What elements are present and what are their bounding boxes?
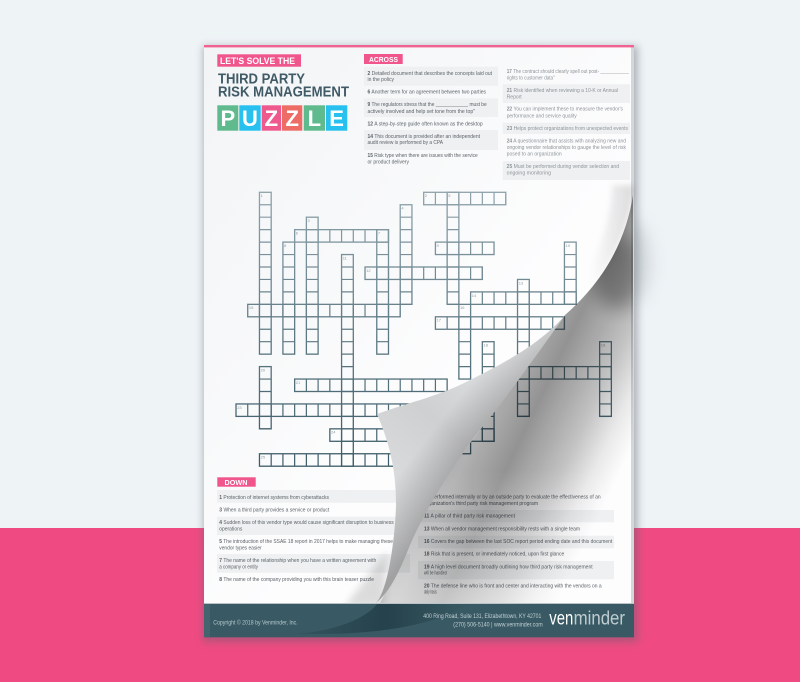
down clues second column: daily basis xyxy=(424,590,437,596)
copyright: Copyright © 2018 by Venminder, Inc. xyxy=(213,619,298,627)
cell numbers: 16 xyxy=(460,305,465,310)
footer bar xyxy=(204,603,634,637)
down clues first column: 3 When a third party provides a service or product xyxy=(219,508,330,514)
down clues second column: organization's third party risk management program xyxy=(424,501,538,507)
cell numbers: 17 xyxy=(436,318,442,323)
across clues first column: or product delivery xyxy=(368,159,409,165)
across clues second column: 21 Risk identified when reviewing a 10-K or Annual xyxy=(507,88,618,94)
venminder logo wordmark xyxy=(549,607,625,629)
puzzle letter tiles xyxy=(217,105,347,131)
curl shadow beyond page edge xyxy=(616,222,648,302)
shadow cast by page curl xyxy=(380,195,644,603)
cell numbers: 18 xyxy=(484,343,489,348)
down clues second column xyxy=(424,495,613,596)
vertical cell dividers xyxy=(265,204,606,466)
puzzle letter tiles: P xyxy=(220,106,235,131)
cell numbers: 25 xyxy=(261,455,266,460)
page sheet xyxy=(204,45,634,637)
cell numbers: 23 xyxy=(237,405,242,410)
puzzle letter tiles: Z xyxy=(285,106,299,131)
puzzle letter tiles: E xyxy=(329,106,344,131)
across clues first column: 14 This document is provided after an independent xyxy=(368,134,481,140)
venminder logo wordmark: ven xyxy=(549,607,573,629)
cell numbers: 15 xyxy=(249,305,254,310)
down clues first column: 4 Sudden loss of this vendor type would cause significant disruption to business xyxy=(219,520,394,526)
cell numbers: 8 xyxy=(284,243,287,248)
across clues first column: audit review is performed by a CPA xyxy=(368,140,444,146)
title xyxy=(218,71,349,101)
down clues first column: 7 The name of the relationship when you have a written agreement with xyxy=(219,558,377,564)
down clues second column: 13 When all vendor management responsibility rests with a single team xyxy=(424,526,580,532)
puzzle letter tiles: U xyxy=(242,106,258,131)
across clues first column: 15 Risk type when there are issues with the service xyxy=(368,153,478,159)
across clues second column: 25 Must be performed during vendor selection and xyxy=(507,164,619,170)
across clues second column: rights to customer data" xyxy=(507,76,555,82)
title: THIRD PARTY xyxy=(218,71,305,87)
across clues first column: 12 A step-by-step guide often known as the desktop xyxy=(368,121,483,127)
cell numbers: 7 xyxy=(378,230,381,236)
across clues first column: 2 Detailed document that describes the concepts laid out xyxy=(368,71,493,77)
clue bands xyxy=(217,490,614,579)
horizontal words xyxy=(236,192,611,466)
down clues second column: 19 A high level document broadly outlining how third party risk management xyxy=(424,564,593,570)
page drop shadow xyxy=(203,46,638,642)
across clues first column: 9 The regulators stress that the ____________ must be xyxy=(368,102,487,108)
across clues first column xyxy=(368,71,493,165)
down clues first column: operations xyxy=(219,527,243,533)
soft shadow left of flap xyxy=(346,554,390,603)
across clues first column: in the policy xyxy=(368,77,394,83)
tagline: let's solve the: LET'S SOLVE THE xyxy=(220,56,295,67)
puzzle letter tiles: L xyxy=(308,106,321,131)
down heading: DOWN xyxy=(224,478,248,487)
across clues second column: 24 A questionnaire that assists with analyzing new and xyxy=(507,139,626,145)
clue bands xyxy=(364,67,630,180)
across clues second column: 17 The contract should clearly spell out post- ___________ xyxy=(507,69,629,75)
venminder logo wordmark: minder xyxy=(574,607,625,629)
across clues second column: ongoing vendor relationships to gauge the level of risk xyxy=(507,145,626,151)
cell numbers: 5 xyxy=(448,193,451,198)
across heading: ACROSS xyxy=(369,55,398,64)
down clues second column: will be handled xyxy=(424,571,447,577)
crossword grid xyxy=(236,192,611,466)
across clues second column: ongoing monitoring xyxy=(507,171,551,177)
across clues second column xyxy=(507,69,629,177)
contact details: 400 Ring Road, Suite 131, Elizabethtown, KY 42701 xyxy=(423,613,542,620)
cell numbers: 21 xyxy=(296,380,301,385)
down clues first column: 5 The introduction of the SSAE 18 report in 2017 helps to make managing these xyxy=(219,539,393,545)
cell numbers: 1 xyxy=(261,193,264,198)
cell numbers: 14 xyxy=(472,293,477,298)
cell numbers: 19 xyxy=(601,343,606,348)
down clues first column xyxy=(219,495,394,583)
across clues second column: 23 Helps protect organizations from unexpected events xyxy=(507,126,628,132)
across clues second column: performance and service quality xyxy=(507,113,577,119)
background: pink band xyxy=(0,528,800,682)
curled page flap xyxy=(376,314,566,603)
vertical words xyxy=(259,192,611,466)
curl shadow on footer xyxy=(293,604,470,634)
down clues second column: 10 Performed internally or by an outside party to evaluate the effectiveness of an xyxy=(424,495,601,501)
title: RISK MANAGEMENT xyxy=(218,85,349,101)
down clues panel xyxy=(217,477,614,596)
down clues second column: 16 Covers the gap between the last SOC report period ending date and this document xyxy=(424,539,613,545)
cell numbers: 2 xyxy=(425,193,428,198)
contact details: (270) 506-5140 | www.venminder.com xyxy=(453,622,543,629)
across clues first column: actively involved and help set tone from the top" xyxy=(368,109,475,115)
shading on the top of the curl xyxy=(565,185,633,315)
across clues first column: 6 Another term for an agreement between two parties xyxy=(368,90,486,96)
down clues first column: a company or entity xyxy=(219,565,258,571)
cell numbers: 24 xyxy=(331,430,336,435)
across clues second column: posed to an organization xyxy=(507,152,562,158)
puzzle letter tiles: Z xyxy=(265,106,278,131)
cell numbers: 20 xyxy=(261,368,266,372)
down heading xyxy=(217,477,256,487)
across clues second column: Report xyxy=(507,94,522,100)
across clues second column: 22 You can implement these to measure the vendor's xyxy=(507,107,623,113)
cell numbers: 9 xyxy=(436,243,440,248)
cell numbers: 12 xyxy=(366,268,371,273)
across clues panel xyxy=(364,54,630,180)
cell numbers xyxy=(237,193,606,460)
cell numbers: 3 xyxy=(308,218,310,223)
down clues second column: 11 A pillar of third party risk management xyxy=(424,514,516,520)
cell numbers: 6 xyxy=(296,230,299,236)
horizontal cell dividers xyxy=(247,199,611,460)
down clues second column: 20 The defense line who is front and center and interacting with the vendors on a xyxy=(424,583,602,589)
header block xyxy=(217,54,349,131)
down clues first column: 8 The name of the company providing you with this brain teaser puzzle xyxy=(219,577,374,583)
cell numbers: 4 xyxy=(401,206,404,211)
contact details xyxy=(423,613,543,629)
down clues first column: 1 Protection of internet systems from cyberattacks xyxy=(219,495,329,501)
down clues first column: vendor types easier xyxy=(219,546,262,552)
cell numbers: 11 xyxy=(343,255,348,260)
cell numbers: 13 xyxy=(519,280,524,285)
down clues second column: 18 Risk that is present, or immediately noticed, upon first glance xyxy=(424,552,565,558)
cell numbers: 10 xyxy=(566,243,571,248)
